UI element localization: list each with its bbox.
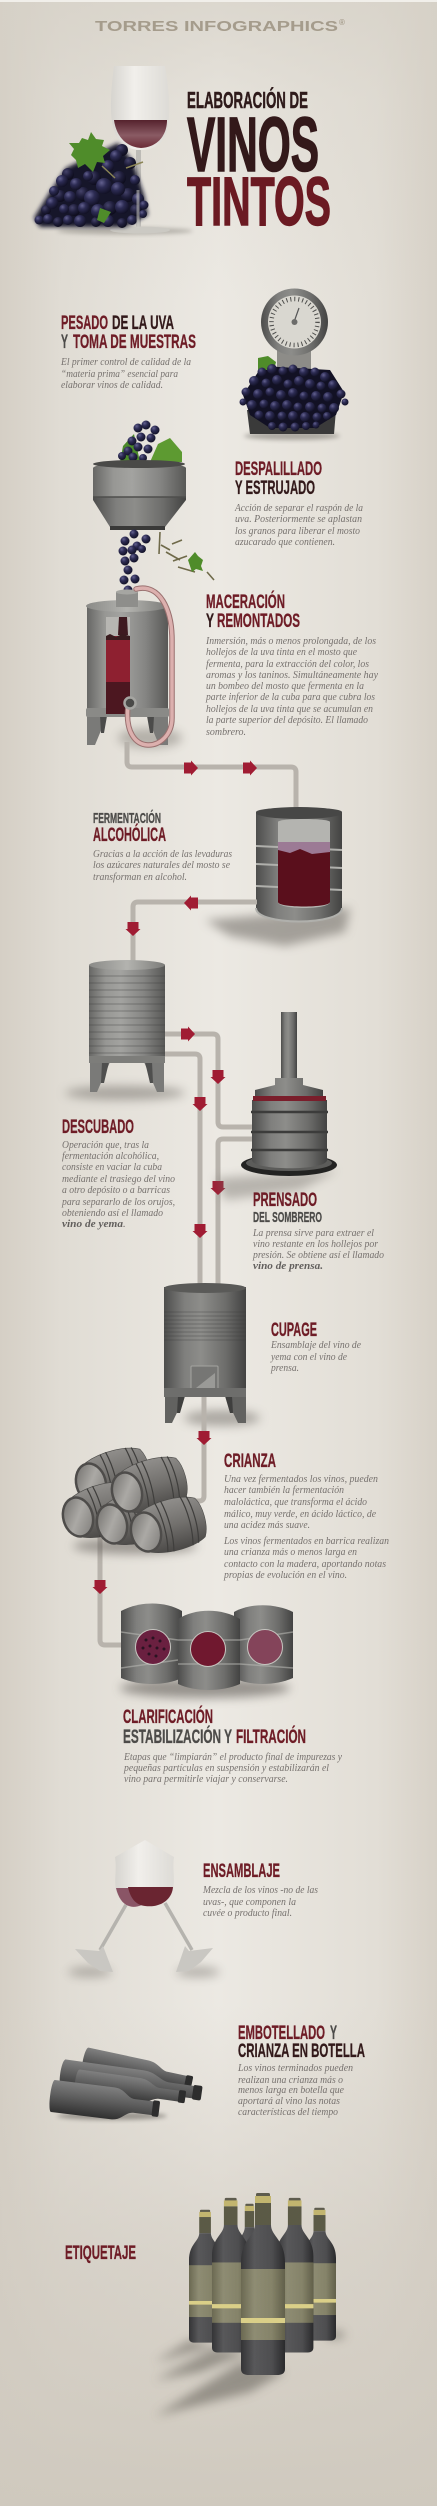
- arrow: [184, 896, 198, 910]
- illustration: standing labelled bottles: [155, 2193, 345, 2416]
- illustration: maceration tank: [86, 590, 182, 748]
- text: ensamblaje: Mezcla de los vinos -no de las: [202, 1885, 318, 1896]
- heading: prensado: [253, 1189, 322, 1226]
- heading: embotellado: Y: [330, 2022, 337, 2044]
- text: crianza: [223, 1474, 389, 1581]
- heading: etiquetaje: ETIQUETAJE: [65, 2242, 136, 2264]
- heading: fermentacion: [93, 809, 166, 846]
- illustration: fermentation tank: [205, 807, 350, 946]
- text: crianza: una acidez más suave.: [224, 1520, 310, 1531]
- title: TINTOS: [187, 163, 331, 240]
- illustration: pink hose: [124, 588, 172, 745]
- illustration: wine glass and grapes: [34, 66, 193, 234]
- text: crianza: Los vinos fermentados en barrica realizan: [223, 1536, 389, 1547]
- text: maceracion: la parte superior del depósito. El llamado: [206, 715, 368, 726]
- text: descubado: mediante el trasiego del vino: [62, 1174, 175, 1185]
- text: prensado: [252, 1228, 384, 1272]
- text: prensado: La prensa sirve para extraer el: [252, 1228, 374, 1239]
- text: cupage: prensa.: [270, 1363, 299, 1374]
- brand header: TORRES INFOGRAPHICS: [95, 18, 338, 35]
- text: clarificacion: Etapas que “limpiarán” el producto final de impurezas y: [123, 1752, 342, 1763]
- title: [187, 86, 331, 240]
- heading: embotellado: EMBOTELLADO: [238, 2022, 325, 2044]
- illustration: stems and leaf: [159, 532, 214, 580]
- text: crianza: propias de evolución en el vino.: [223, 1570, 347, 1581]
- text: crianza: Una vez fermentados los vinos, pueden: [224, 1474, 378, 1485]
- text: embotellado: Los vinos terminados pueden: [237, 2063, 353, 2074]
- text: crianza: málico, muy verde, en ácido láctico, de: [224, 1509, 376, 1520]
- text: embotellado: características del tiempo: [238, 2107, 338, 2118]
- text: maceracion: sombrero.: [206, 727, 246, 738]
- heading: pesado: PESADO: [61, 312, 108, 334]
- text: fermentacion: los azúcares naturales del mosto se: [93, 860, 230, 871]
- text: ensamblaje: uvas-, que componen la: [203, 1897, 296, 1908]
- text: prensado: vino restante en los hollejos por: [253, 1239, 379, 1250]
- title: VINOS: [187, 102, 319, 188]
- text: despalillado: uva. Posteriormente se aplastan: [235, 514, 362, 525]
- text: ensamblaje: cuvée o producto final.: [203, 1908, 292, 1919]
- heading: clarificacion: ESTABILIZACIÓN Y: [123, 1724, 232, 1748]
- heading: clarificacion: CLARIFICACIÓN: [123, 1704, 213, 1728]
- text: maceracion: Inmersión, más o menos prolongada, de los: [205, 636, 376, 647]
- text: clarificacion: [123, 1752, 342, 1785]
- text: clarificacion: vino para permitirle viajar y conservarse.: [124, 1774, 288, 1785]
- heading: maceracion: Y: [206, 610, 214, 632]
- text: fermentacion: transforman en alcohol.: [93, 872, 187, 883]
- heading: prensado: PRENSADO: [253, 1189, 317, 1211]
- pipe: barrels to clarification: [100, 1535, 124, 1645]
- illustration: falling grapes: [118, 530, 150, 594]
- illustration: cupage tank: [164, 1283, 260, 1426]
- text: crianza: una crianza más o menos larga en: [224, 1547, 357, 1558]
- illustration: lying bottles: [48, 2047, 204, 2125]
- heading: ensamblaje: ENSAMBLAJE: [203, 1860, 280, 1882]
- heading: despalillado: [235, 458, 322, 499]
- heading: pesado: [61, 312, 196, 353]
- text: cupage: [270, 1340, 361, 1374]
- text: pesado: El primer control de calidad de la: [60, 357, 191, 368]
- text: embotellado: [237, 2063, 353, 2118]
- text: maceracion: aromas y los taninos. Simultáneamente hay: [206, 670, 378, 681]
- title: ELABORACIÓN DE: [187, 86, 308, 113]
- illustration: three filter tanks: [120, 1604, 293, 1698]
- heading: pesado: TOMA DE MUESTRAS: [73, 331, 196, 353]
- illustration: descube tank: [65, 960, 185, 1100]
- heading: crianza: CRIANZA: [224, 1450, 276, 1472]
- illustration: scale with grapes: [240, 288, 348, 440]
- text: descubado: consiste en vaciar la cuba: [62, 1162, 162, 1173]
- text: descubado: a otro depósito o a barricas: [62, 1185, 170, 1196]
- text: prensado: presión. Se obtiene así el llamado: [252, 1250, 384, 1261]
- heading: clarificacion: FILTRACIÓN: [236, 1724, 306, 1748]
- text: fermentacion: [93, 849, 232, 883]
- text: embotellado: realizan una crianza más o: [238, 2075, 343, 2086]
- text: crianza: contacto con la madera, aportando notas: [224, 1559, 386, 1570]
- arrow: [126, 922, 140, 936]
- text: ensamblaje: [202, 1885, 318, 1919]
- text: maceracion: un bombeo del mosto que fermenta en la: [206, 681, 364, 692]
- text: maceracion: fermenta, para la extracción del color, los: [206, 659, 369, 670]
- text: descubado: Operación que, tras la: [62, 1140, 149, 1151]
- pipe: maceration to fermentation: [127, 742, 296, 808]
- text: maceracion: hollejos de la uva tinta que se acumulan en: [206, 704, 373, 715]
- arrows on pipes: [181, 1026, 226, 1238]
- heading: maceracion: REMONTADOS: [217, 610, 300, 632]
- text: despalillado: los granos para liberar el mosto: [235, 526, 360, 537]
- heading: fermentacion: FERMENTACIÓN: [93, 809, 161, 827]
- heading: clarificacion: [123, 1704, 306, 1748]
- arrow: [92, 1580, 108, 1594]
- text: despalillado: Acción de separar el raspón de la: [234, 503, 363, 514]
- text: maceracion: [205, 636, 378, 738]
- text: clarificacion: pequeñas partículas en suspensión y estabilizarán el: [123, 1763, 329, 1774]
- text: embotellado: menos larga en botella que: [238, 2085, 344, 2096]
- text: crianza: maloláctica, que transforma el ácido: [224, 1497, 367, 1508]
- arrow: [184, 760, 198, 776]
- pipe: cupage to barrels: [165, 1397, 204, 1501]
- heading: despalillado: Y ESTRUJADO: [235, 477, 315, 499]
- text: crianza: hacer también la fermentación: [224, 1485, 344, 1496]
- text: descubado: vino de yema: [62, 1219, 124, 1230]
- text: maceracion: hollejos de la uva tinta en el mosto que: [206, 647, 357, 658]
- text: maceracion: parte inferior de la cuba para que cubra los: [205, 692, 375, 703]
- heading: despalillado: DESPALILLADO: [235, 458, 322, 480]
- text: pesado: elaborar vinos de calidad.: [61, 380, 163, 391]
- text: prensado: vino de prensa.: [253, 1261, 323, 1272]
- arrow: [243, 760, 257, 776]
- heading: cupage: CUPAGE: [271, 1319, 317, 1341]
- text: pesado: [60, 357, 191, 391]
- text: cupage: yema con el vino de: [270, 1352, 347, 1363]
- heading: pesado: Y: [61, 331, 68, 353]
- pipes: descube to press and cupage: [165, 1034, 254, 1284]
- registered mark: ®: [339, 18, 345, 27]
- illustration: barrels: [56, 1442, 211, 1561]
- text: pesado: “materia prima” esencial para: [61, 369, 178, 380]
- heading: fermentacion: ALCOHÓLICA: [93, 822, 166, 846]
- illustration: hopper with grapes: [93, 420, 186, 530]
- text: descubado: [61, 1140, 175, 1230]
- text: descubado: fermentación alcohólica,: [62, 1151, 159, 1162]
- text: embotellado: aportará al vino las notas: [238, 2096, 340, 2107]
- text: fermentacion: Gracias a la acción de las levaduras: [93, 849, 232, 860]
- text: descubado: obteniendo así el llamado: [62, 1208, 163, 1219]
- heading: pesado: DE LA UVA: [112, 312, 174, 334]
- arrow: [196, 1431, 212, 1445]
- heading: maceracion: [206, 589, 300, 632]
- text: descubado: para separarlo de los orujos,: [61, 1197, 175, 1208]
- text: cupage: Ensamblaje del vino de: [270, 1340, 361, 1351]
- text: despalillado: [234, 503, 363, 548]
- heading: descubado: DESCUBADO: [62, 1116, 134, 1138]
- heading: prensado: DEL SOMBRERO: [253, 1209, 322, 1226]
- text: despalillado: azucarado que contienen.: [235, 537, 335, 548]
- heading: maceracion: MACERACIÓN: [206, 589, 285, 613]
- text: descubado: .: [123, 1219, 126, 1230]
- illustration: two crossed glasses: [68, 1840, 220, 1977]
- illustration: wine press: [215, 1012, 338, 1200]
- heading: embotellado: [238, 2022, 365, 2062]
- pipe: fermentation to descube: [133, 902, 257, 962]
